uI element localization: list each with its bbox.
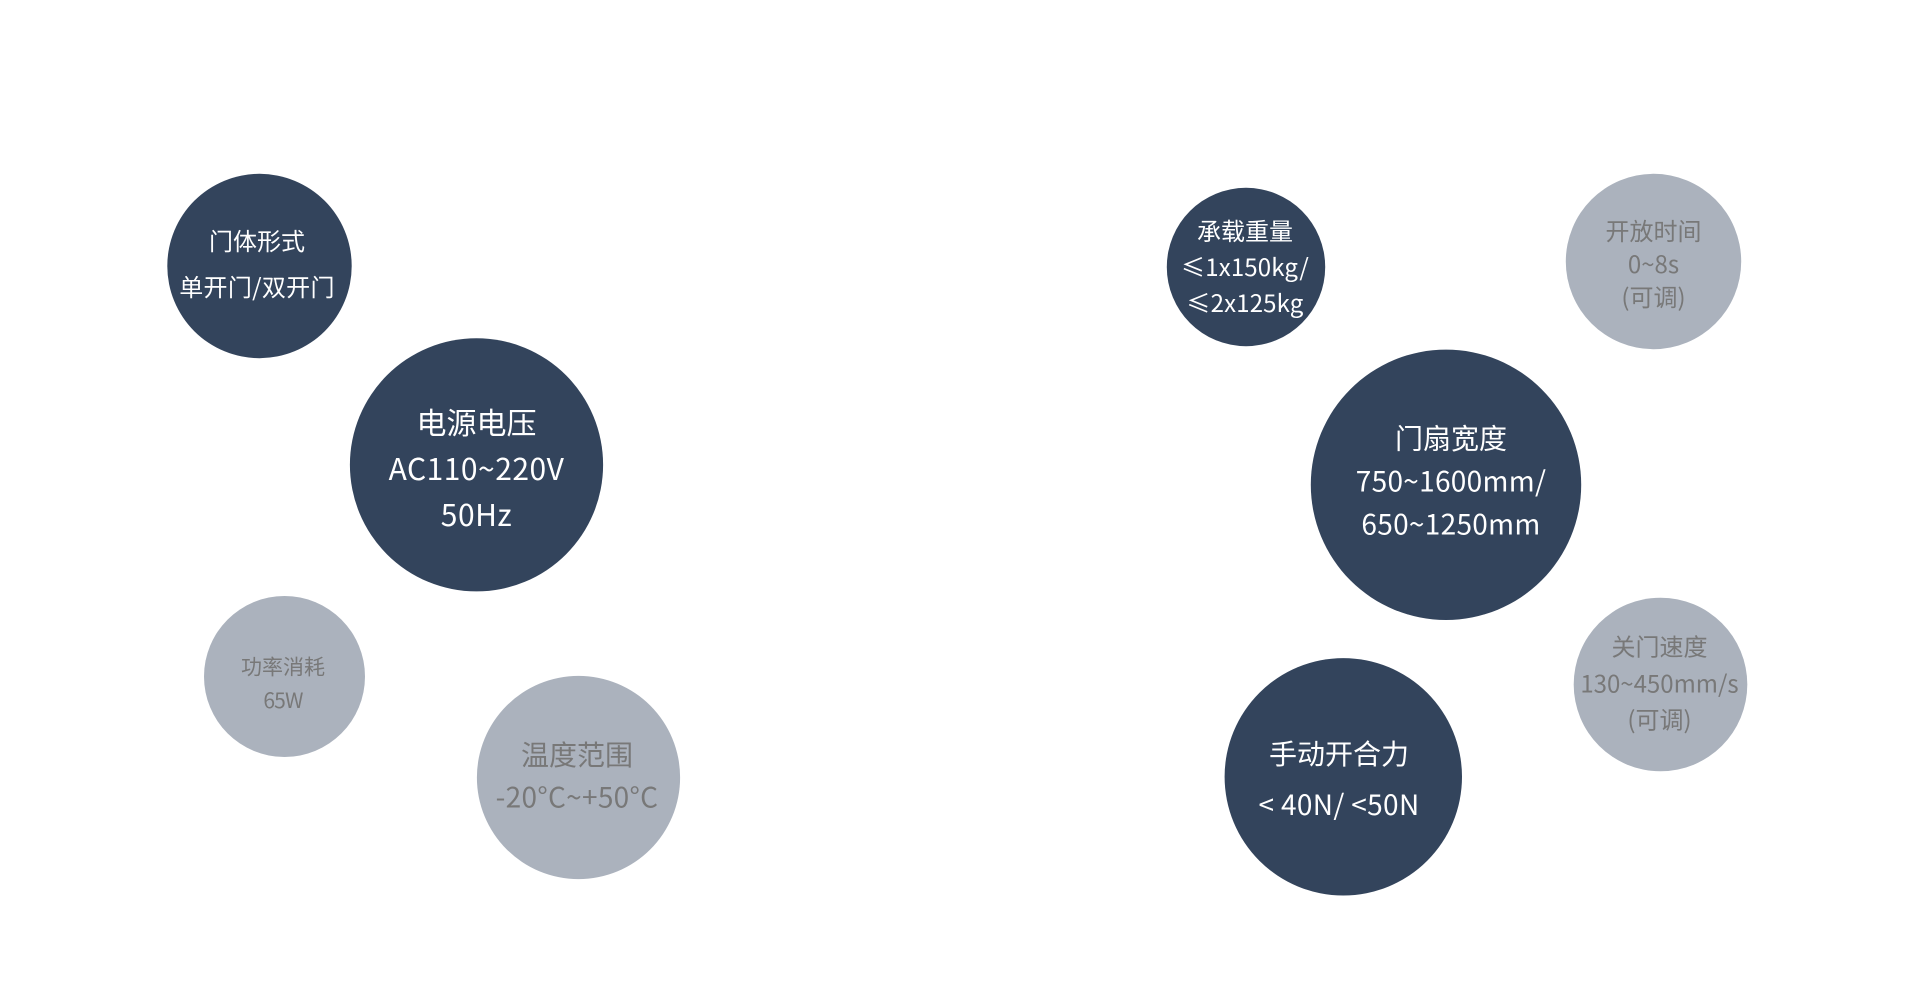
bubble: supply voltage: 50Hz [441, 491, 512, 535]
bubble: temperature range: 温度范围 [521, 734, 633, 774]
bubble: supply voltage [350, 338, 603, 591]
bubble: load weight: ≤2x125kg [1187, 284, 1304, 319]
bubble: load weight [1167, 188, 1325, 346]
bubble: power consumption [204, 596, 365, 757]
bubble: manual opening force: < 40N/ <50N [1258, 784, 1420, 824]
bubble: manual opening force [1225, 658, 1462, 896]
bubble: closing speed: (可调) [1627, 700, 1692, 736]
bubble: closing speed: 关门速度 [1612, 628, 1708, 662]
bubble: temperature range: -20°C~+50°C [496, 776, 658, 816]
bubble: door leaf width [1311, 350, 1581, 620]
bubble: door type [167, 174, 352, 358]
bubble: door type: 单开门/双开门 [179, 268, 335, 303]
bubble: door leaf width: 750~1600mm/ [1356, 460, 1546, 500]
bubble: power consumption: 65W [263, 685, 303, 715]
bubble: load weight: 承载重量 [1197, 212, 1293, 247]
bubble: closing speed: 130~450mm/s [1580, 664, 1739, 700]
bubble: supply voltage: 电源电压 [416, 399, 536, 443]
bubble: opening time: 0~8s [1628, 245, 1679, 280]
bubble: opening time: (可调) [1621, 278, 1686, 313]
bubble: opening time [1566, 174, 1741, 349]
bubble: opening time: 开放时间 [1606, 212, 1702, 247]
bubble: door type: 门体形式 [209, 222, 305, 257]
bubble: power consumption: 功率消耗 [241, 652, 325, 682]
bubble: manual opening force: 手动开合力 [1269, 733, 1409, 773]
bubble: closing speed [1574, 598, 1747, 771]
bubble: supply voltage: AC110~220V [389, 445, 565, 489]
bubble: door leaf width: 650~1250mm [1361, 504, 1541, 544]
bubble: door leaf width: 门扇宽度 [1395, 418, 1507, 458]
bubble: load weight: ≤1x150kg/ [1181, 248, 1309, 283]
bubble: temperature range [477, 676, 680, 879]
